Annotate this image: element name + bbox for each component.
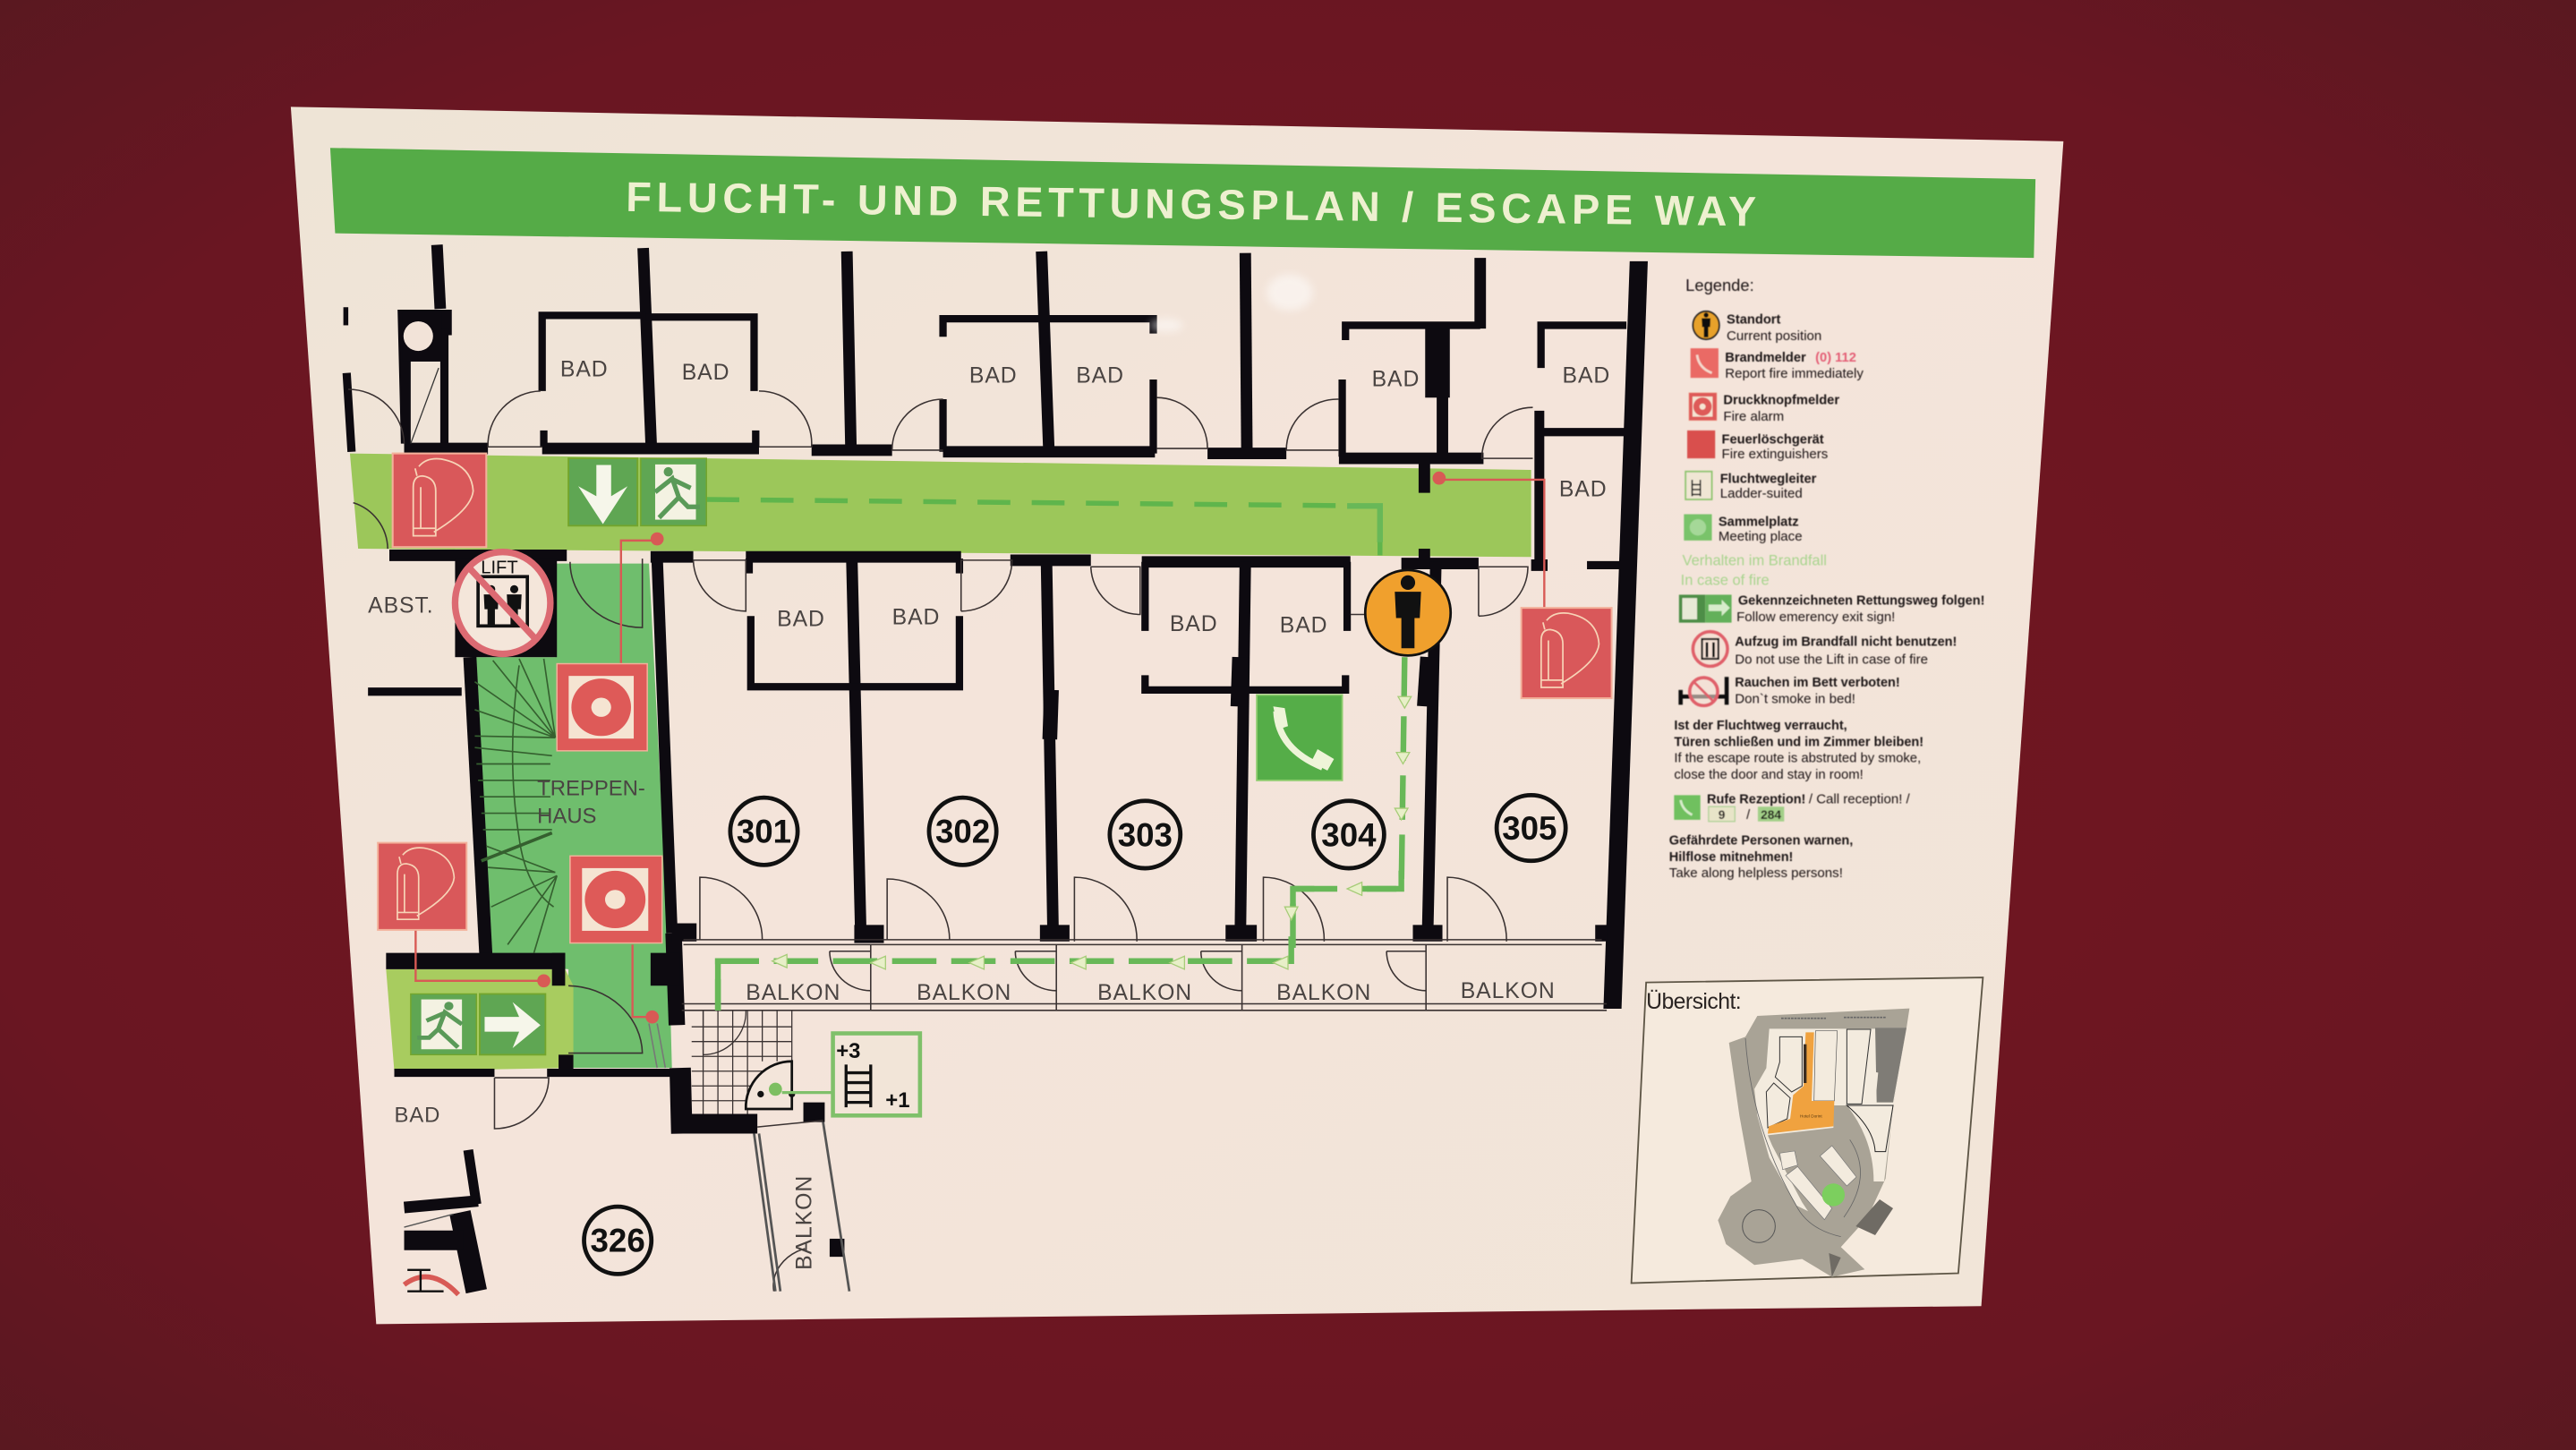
legend: follow exit sign	[1679, 593, 1984, 625]
overview site map	[1718, 1009, 1909, 1277]
room labels: BALKON	[1097, 981, 1192, 1005]
legend: call reception: /	[1746, 808, 1751, 823]
legend: follow exit sign: Follow emerency exit sign!	[1736, 610, 1895, 625]
room number text: 302	[935, 814, 990, 850]
room labels: BAD	[395, 1104, 440, 1128]
right outer wall	[1603, 261, 1648, 1009]
legend: ladder: Ladder-suited	[1720, 486, 1803, 501]
legend: call reception: 284	[1761, 808, 1781, 822]
room number text: 303	[1118, 816, 1173, 853]
balcony tile grid	[688, 1011, 792, 1113]
paper sheet	[291, 107, 2063, 1324]
glare	[1150, 275, 1313, 332]
lower exit walls	[386, 957, 565, 966]
legend: behaviour heading	[1681, 552, 1827, 588]
legend: behaviour heading: Verhalten im Brandfall	[1683, 552, 1827, 568]
legend: fire alarm call: Brandmelder	[1725, 351, 1806, 365]
legend: extinguisher: Fire extinguishers	[1722, 447, 1828, 462]
title banner	[330, 148, 2035, 258]
stairs	[474, 659, 557, 953]
legend: smoke in escape route: Ist der Fluchtweg verraucht,	[1674, 719, 1847, 733]
icon: arrow right	[480, 994, 545, 1054]
legend: no lift	[1693, 632, 1957, 668]
icon: fire extinguisher corridor	[393, 454, 486, 547]
room number text: 305	[1502, 810, 1557, 847]
legend: ladder	[1685, 472, 1817, 501]
floor plan	[345, 244, 1648, 1294]
room number text: 326	[591, 1223, 645, 1259]
legend: smoke in escape route: If the escape route is abstruted by smoke,	[1674, 752, 1921, 766]
room labels: BAD	[560, 357, 609, 381]
legend: smoke in escape route: close the door and stay in room!	[1674, 768, 1864, 782]
legend: extinguisher: Feuerlöschgerät	[1722, 433, 1824, 448]
route arrows	[772, 696, 1412, 969]
legend: warn persons: Take along helpless persons!	[1669, 866, 1843, 881]
legend: meeting place: Sammelplatz	[1719, 515, 1799, 529]
room labels: BAD	[682, 361, 729, 385]
escape route corridor	[706, 499, 1380, 555]
legend: no smoking in bed: Don`t smoke in bed!	[1735, 692, 1855, 707]
icon: arrow down	[568, 458, 637, 525]
legend: smoke in escape route: Türen schließen und im Zimmer bleiben!	[1674, 735, 1923, 749]
legend: no smoking in bed	[1681, 676, 1900, 707]
legend: behaviour heading: In case of fire	[1681, 572, 1770, 588]
room labels: BALKON	[793, 1175, 817, 1270]
legend: meeting place: Meeting place	[1719, 529, 1803, 544]
icon: ladder sign: +1	[885, 1088, 910, 1113]
escape door landing	[746, 1062, 795, 1109]
legend: call reception: 9	[1719, 808, 1726, 822]
room labels: BAD	[777, 607, 825, 631]
legend: no lift: Aufzug im Brandfall nicht benutzen!	[1735, 635, 1957, 649]
legend: smoke in escape route	[1674, 719, 1923, 782]
icon: current position	[1365, 570, 1451, 655]
icon: fire alarm upper	[557, 664, 647, 751]
legend: call reception: / Call reception! /	[1809, 792, 1911, 807]
room labels: BAD	[892, 605, 940, 629]
legend: fire alarm call: Report fire immediately	[1725, 366, 1864, 381]
legend heading: Legende:	[1685, 276, 1754, 294]
legend: follow exit sign: Gekennzeichneten Rettungsweg folgen!	[1738, 593, 1984, 608]
lower exit corridor	[386, 969, 574, 1071]
legend: meeting place	[1684, 515, 1803, 544]
escape route room and balcony	[718, 657, 1404, 1011]
room number text: 304	[1321, 816, 1377, 853]
legend: fire alarm call: (0) 112	[1815, 351, 1856, 365]
legend: push button alarm	[1689, 393, 1839, 424]
icon: ladder sign: +3	[836, 1039, 860, 1063]
shaft	[397, 310, 452, 447]
legend: no lift: Do not use the Lift in case of fire	[1735, 652, 1928, 668]
red connector lines	[415, 480, 1544, 1017]
walls	[345, 244, 1626, 1292]
doors	[348, 389, 1532, 1292]
room labels: BAD	[1170, 612, 1218, 636]
legend: warn persons	[1669, 833, 1853, 881]
corridor	[350, 454, 1531, 557]
icon: no lift sign: LIFT	[481, 559, 518, 578]
red connector dots	[537, 472, 1446, 1024]
room numbers	[584, 795, 1565, 1274]
legend: warn persons: Gefährdete Personen warnen,	[1669, 833, 1853, 848]
title: FLUCHT- UND RETTUNGSPLAN / ESCAPE WAY	[626, 174, 1756, 235]
legend: push button alarm: Druckknopfmelder	[1723, 394, 1839, 408]
room labels	[368, 357, 1610, 1270]
icon: exit runner corridor	[641, 458, 706, 525]
overview box	[1632, 977, 1983, 1284]
icon: exit runner lower	[411, 994, 476, 1054]
room labels: ABST.	[368, 594, 434, 618]
legend: warn persons: Hilflose mitnehmen!	[1669, 850, 1793, 865]
legend: current position	[1693, 311, 1821, 344]
icon: telephone	[1257, 695, 1343, 780]
room labels: BAD	[1559, 477, 1608, 501]
icon: fire extinguisher left	[378, 843, 466, 930]
legend: fire alarm call	[1691, 348, 1864, 381]
room labels: BAD	[1563, 364, 1610, 388]
legend: call reception	[1674, 792, 1911, 823]
room labels: HAUS	[537, 805, 596, 829]
lower left room walls	[468, 1150, 476, 1204]
legend: push button alarm: Fire alarm	[1723, 409, 1784, 424]
icon: no lift sign	[455, 552, 557, 657]
balcony lines	[649, 940, 1607, 1292]
room labels: BALKON	[917, 981, 1011, 1005]
wall pillars	[672, 924, 1608, 1257]
icon: fire extinguisher room 305	[1522, 608, 1612, 698]
legend: current position: Current position	[1727, 328, 1821, 344]
legend: current position: Standort	[1727, 313, 1780, 328]
room number text: 301	[737, 814, 791, 850]
lower left partial room details	[405, 1214, 458, 1294]
overview site map: Hotel Dorint	[1800, 1114, 1822, 1119]
room labels: BAD	[1372, 367, 1420, 391]
room labels: TREPPEN-	[537, 776, 645, 800]
legend: extinguisher	[1687, 431, 1828, 462]
room labels: BAD	[1280, 614, 1328, 638]
escape route corners	[718, 506, 1402, 1011]
staircase area	[470, 564, 672, 1068]
overview heading: Übersicht:	[1646, 990, 1741, 1014]
room labels: BAD	[1076, 364, 1124, 388]
room labels: BALKON	[1276, 981, 1371, 1005]
room labels: BALKON	[746, 981, 840, 1005]
icon: ladder sign	[833, 1034, 920, 1115]
legend: ladder: Fluchtwegleiter	[1720, 473, 1817, 487]
room number text	[591, 810, 1557, 1259]
legend: no smoking in bed: Rauchen im Bett verboten!	[1735, 676, 1900, 690]
legend: call reception: Rufe Rezeption!	[1707, 793, 1805, 807]
room labels: BAD	[969, 364, 1018, 388]
icon: fire alarm lower	[570, 856, 662, 943]
legend	[1669, 276, 1984, 881]
room labels: BALKON	[1461, 979, 1556, 1003]
ladder connector	[782, 1092, 833, 1094]
